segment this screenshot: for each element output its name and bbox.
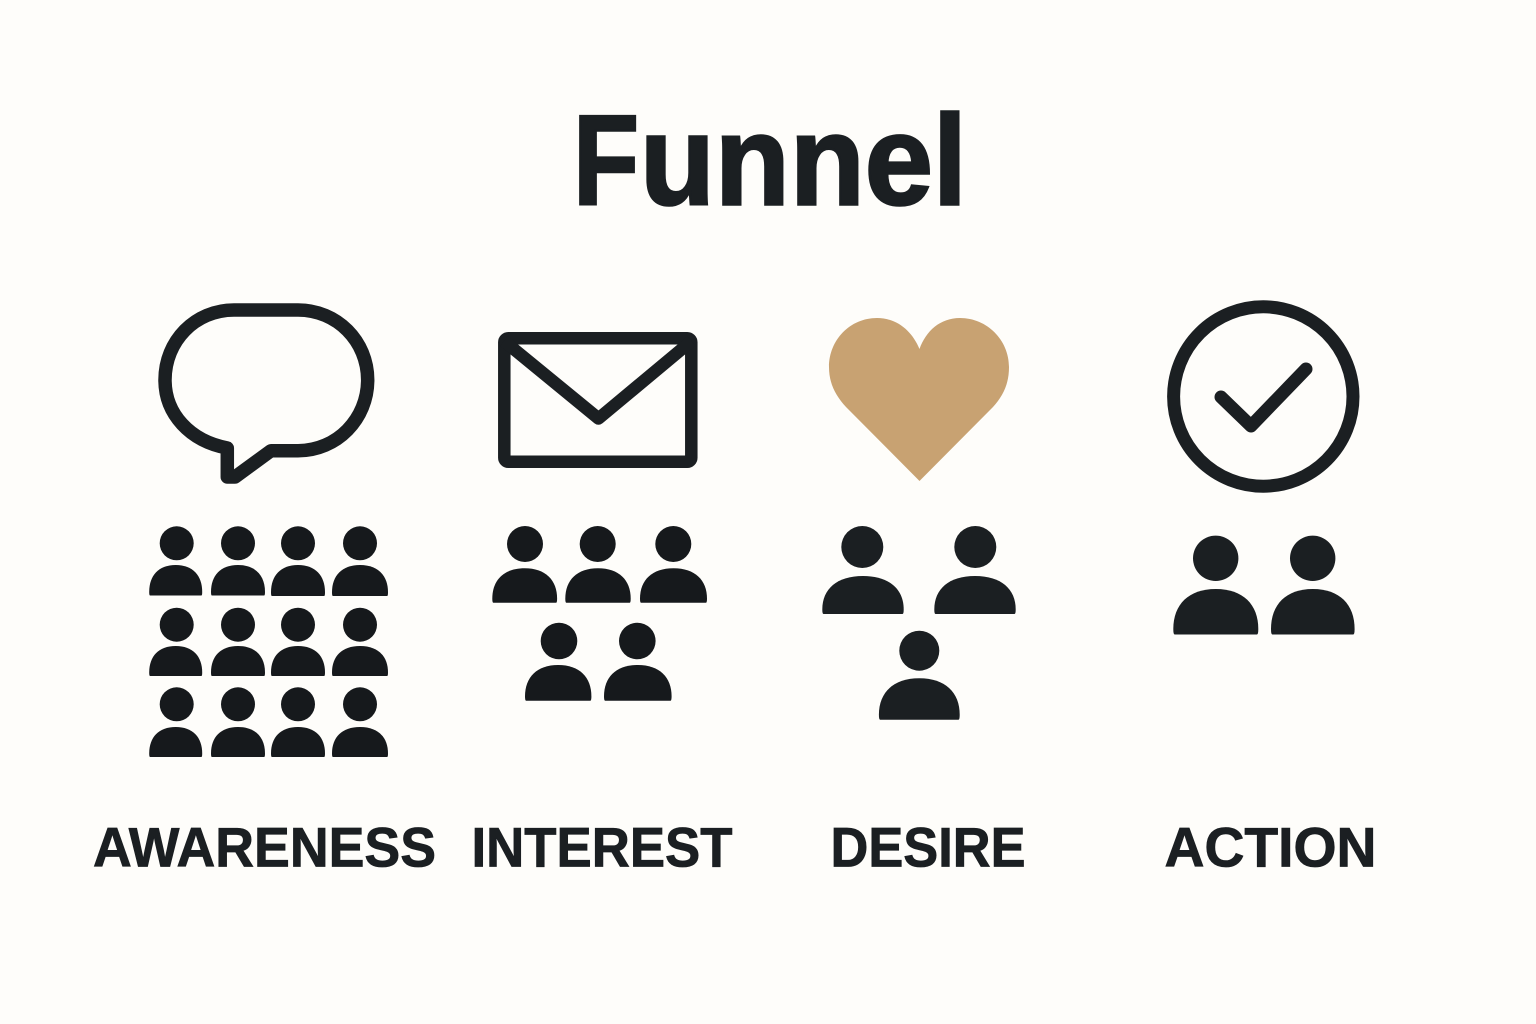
people: desire: [822, 526, 1016, 720]
label: interest: INTEREST: [472, 816, 732, 878]
icon: heart: [829, 318, 1009, 481]
label: awareness: AWARENESS: [93, 816, 436, 878]
icon: check circle: [1174, 307, 1353, 486]
icon: envelope: [504, 338, 692, 462]
title: unnel: [640, 90, 967, 233]
title: F: [573, 90, 639, 233]
label: action: ACTION: [1164, 816, 1376, 878]
icon: speech bubble: [165, 310, 368, 477]
label: desire: DESIRE: [830, 816, 1026, 878]
people: interest: [492, 526, 707, 701]
people: action: [1173, 536, 1355, 634]
people: awareness: [149, 526, 388, 757]
